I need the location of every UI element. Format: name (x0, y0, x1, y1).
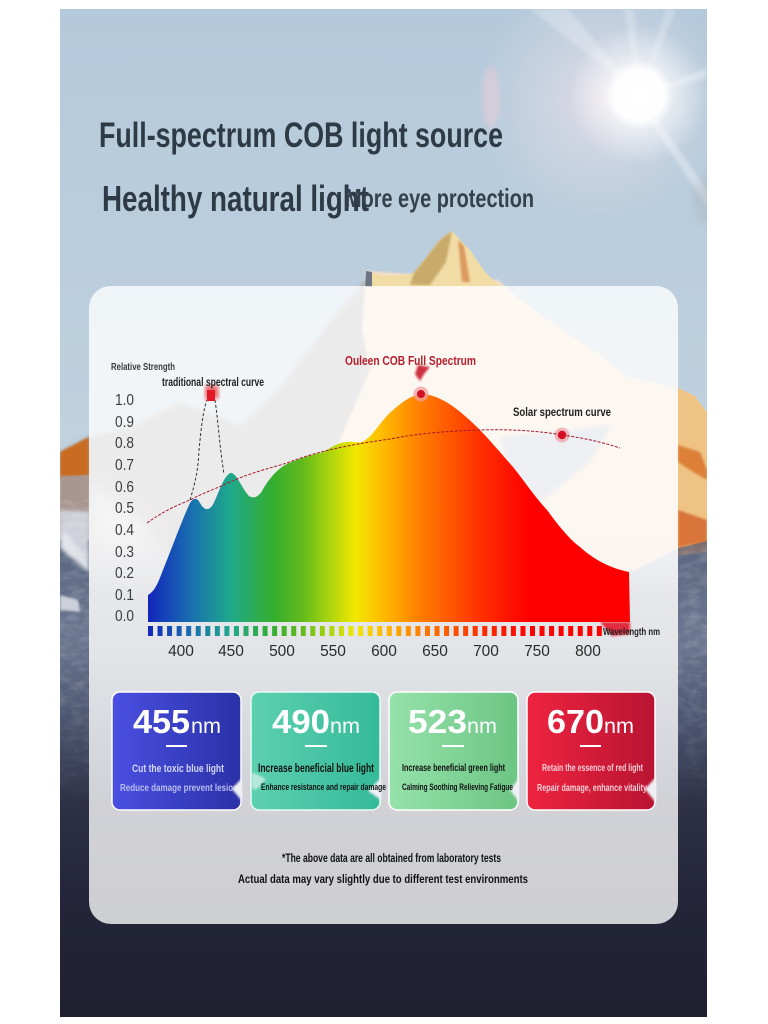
y axis title: Relative Strength (111, 361, 175, 373)
y axis labels: 1.0 (115, 392, 134, 409)
x axis labels: 400 (168, 643, 194, 660)
card: 670nm: Repair damage, enhance vitality (537, 782, 647, 794)
x axis labels: 600 (371, 643, 397, 660)
solar spectrum curve (147, 405, 620, 523)
Ouleen COB Full Spectrum marker (345, 353, 476, 402)
card: 455nm: Reduce damage prevent lesion (120, 782, 238, 794)
snowy ridge lines on the flank (88, 494, 139, 540)
card: 490nm: Enhance resistance and repair damage (261, 782, 386, 793)
card: 455nm: 455 (133, 703, 190, 740)
y axis labels: 0.6 (115, 479, 134, 496)
card: 523nm: Calming Soothing Relieving Fatigue (402, 782, 513, 793)
red corner smear (600, 622, 630, 636)
traditional spectral curve: traditional spectral curve (162, 377, 264, 389)
card: 490nm: 490 (272, 703, 330, 740)
card: 490nm: Increase beneficial blue light (258, 763, 374, 775)
solar spectrum curve: Solar spectrum curve (513, 405, 611, 419)
x axis labels: 700 (473, 643, 499, 660)
card: 523nm: nm (467, 715, 497, 738)
y axis labels (115, 392, 134, 625)
full spectrum area (148, 394, 630, 622)
lower slope side strips (60, 540, 707, 1017)
right orange rock face (678, 388, 707, 556)
golden summit (365, 231, 500, 287)
x axis labels: 450 (218, 643, 244, 660)
Ouleen COB Full Spectrum marker: Ouleen COB Full Spectrum (345, 353, 476, 368)
y axis labels: 0.8 (115, 435, 134, 452)
y axis labels: 0.2 (115, 565, 134, 582)
spectrum chart (111, 353, 660, 660)
rock texture (60, 500, 707, 764)
x axis labels: 500 (269, 643, 295, 660)
card: 670nm: nm (604, 715, 634, 738)
card: 670nm (527, 692, 656, 810)
translucent panel (89, 286, 678, 924)
card: 670nm: 670 (547, 703, 604, 740)
card: 523nm: Increase beneficial green light (402, 762, 505, 774)
title: Healthy natural light: Healthy natural light (102, 178, 369, 219)
snow main peak (339, 270, 707, 572)
card: 455nm (112, 692, 242, 810)
footnote: *The above data are all obtained from laboratory tests (282, 851, 501, 865)
footnote: Actual data may vary slightly due to different test environments (238, 872, 528, 886)
footnote (238, 851, 528, 886)
lower slope behind panel (89, 530, 678, 1017)
y axis labels: 0.0 (115, 608, 134, 625)
sun glow (480, 9, 707, 222)
card: 490nm: nm (330, 715, 360, 738)
x axis labels: 650 (422, 643, 448, 660)
spectrum ticks (148, 626, 604, 636)
card: 670nm: Retain the essence of red light (542, 762, 643, 774)
x axis labels (168, 643, 601, 660)
card: 455nm: nm (191, 715, 221, 738)
y axis labels: 0.5 (115, 500, 134, 517)
x axis labels: 550 (320, 643, 346, 660)
crevasse shadow (500, 425, 612, 502)
y axis labels: 0.1 (115, 587, 134, 604)
y axis labels: 0.9 (115, 414, 134, 431)
far grey rock flank (60, 280, 370, 547)
card: 455nm: Cut the toxic blue light (132, 763, 224, 775)
subtitle: More eye protection: More eye protection (345, 183, 534, 213)
y axis labels: 0.3 (115, 544, 134, 561)
y axis labels: 0.4 (115, 522, 134, 539)
x axis labels: 800 (575, 643, 601, 660)
card: 490nm (251, 692, 386, 810)
left rock and snow face (60, 437, 89, 612)
traditional spectral curve (162, 377, 264, 500)
x axis title: Wavelength nm (603, 626, 660, 638)
card: 523nm (389, 692, 519, 810)
y axis labels: 0.7 (115, 457, 134, 474)
x axis labels: 750 (524, 643, 550, 660)
card: 523nm: 523 (408, 703, 467, 740)
title: Full-spectrum COB light source: Full-spectrum COB light source (99, 116, 503, 155)
